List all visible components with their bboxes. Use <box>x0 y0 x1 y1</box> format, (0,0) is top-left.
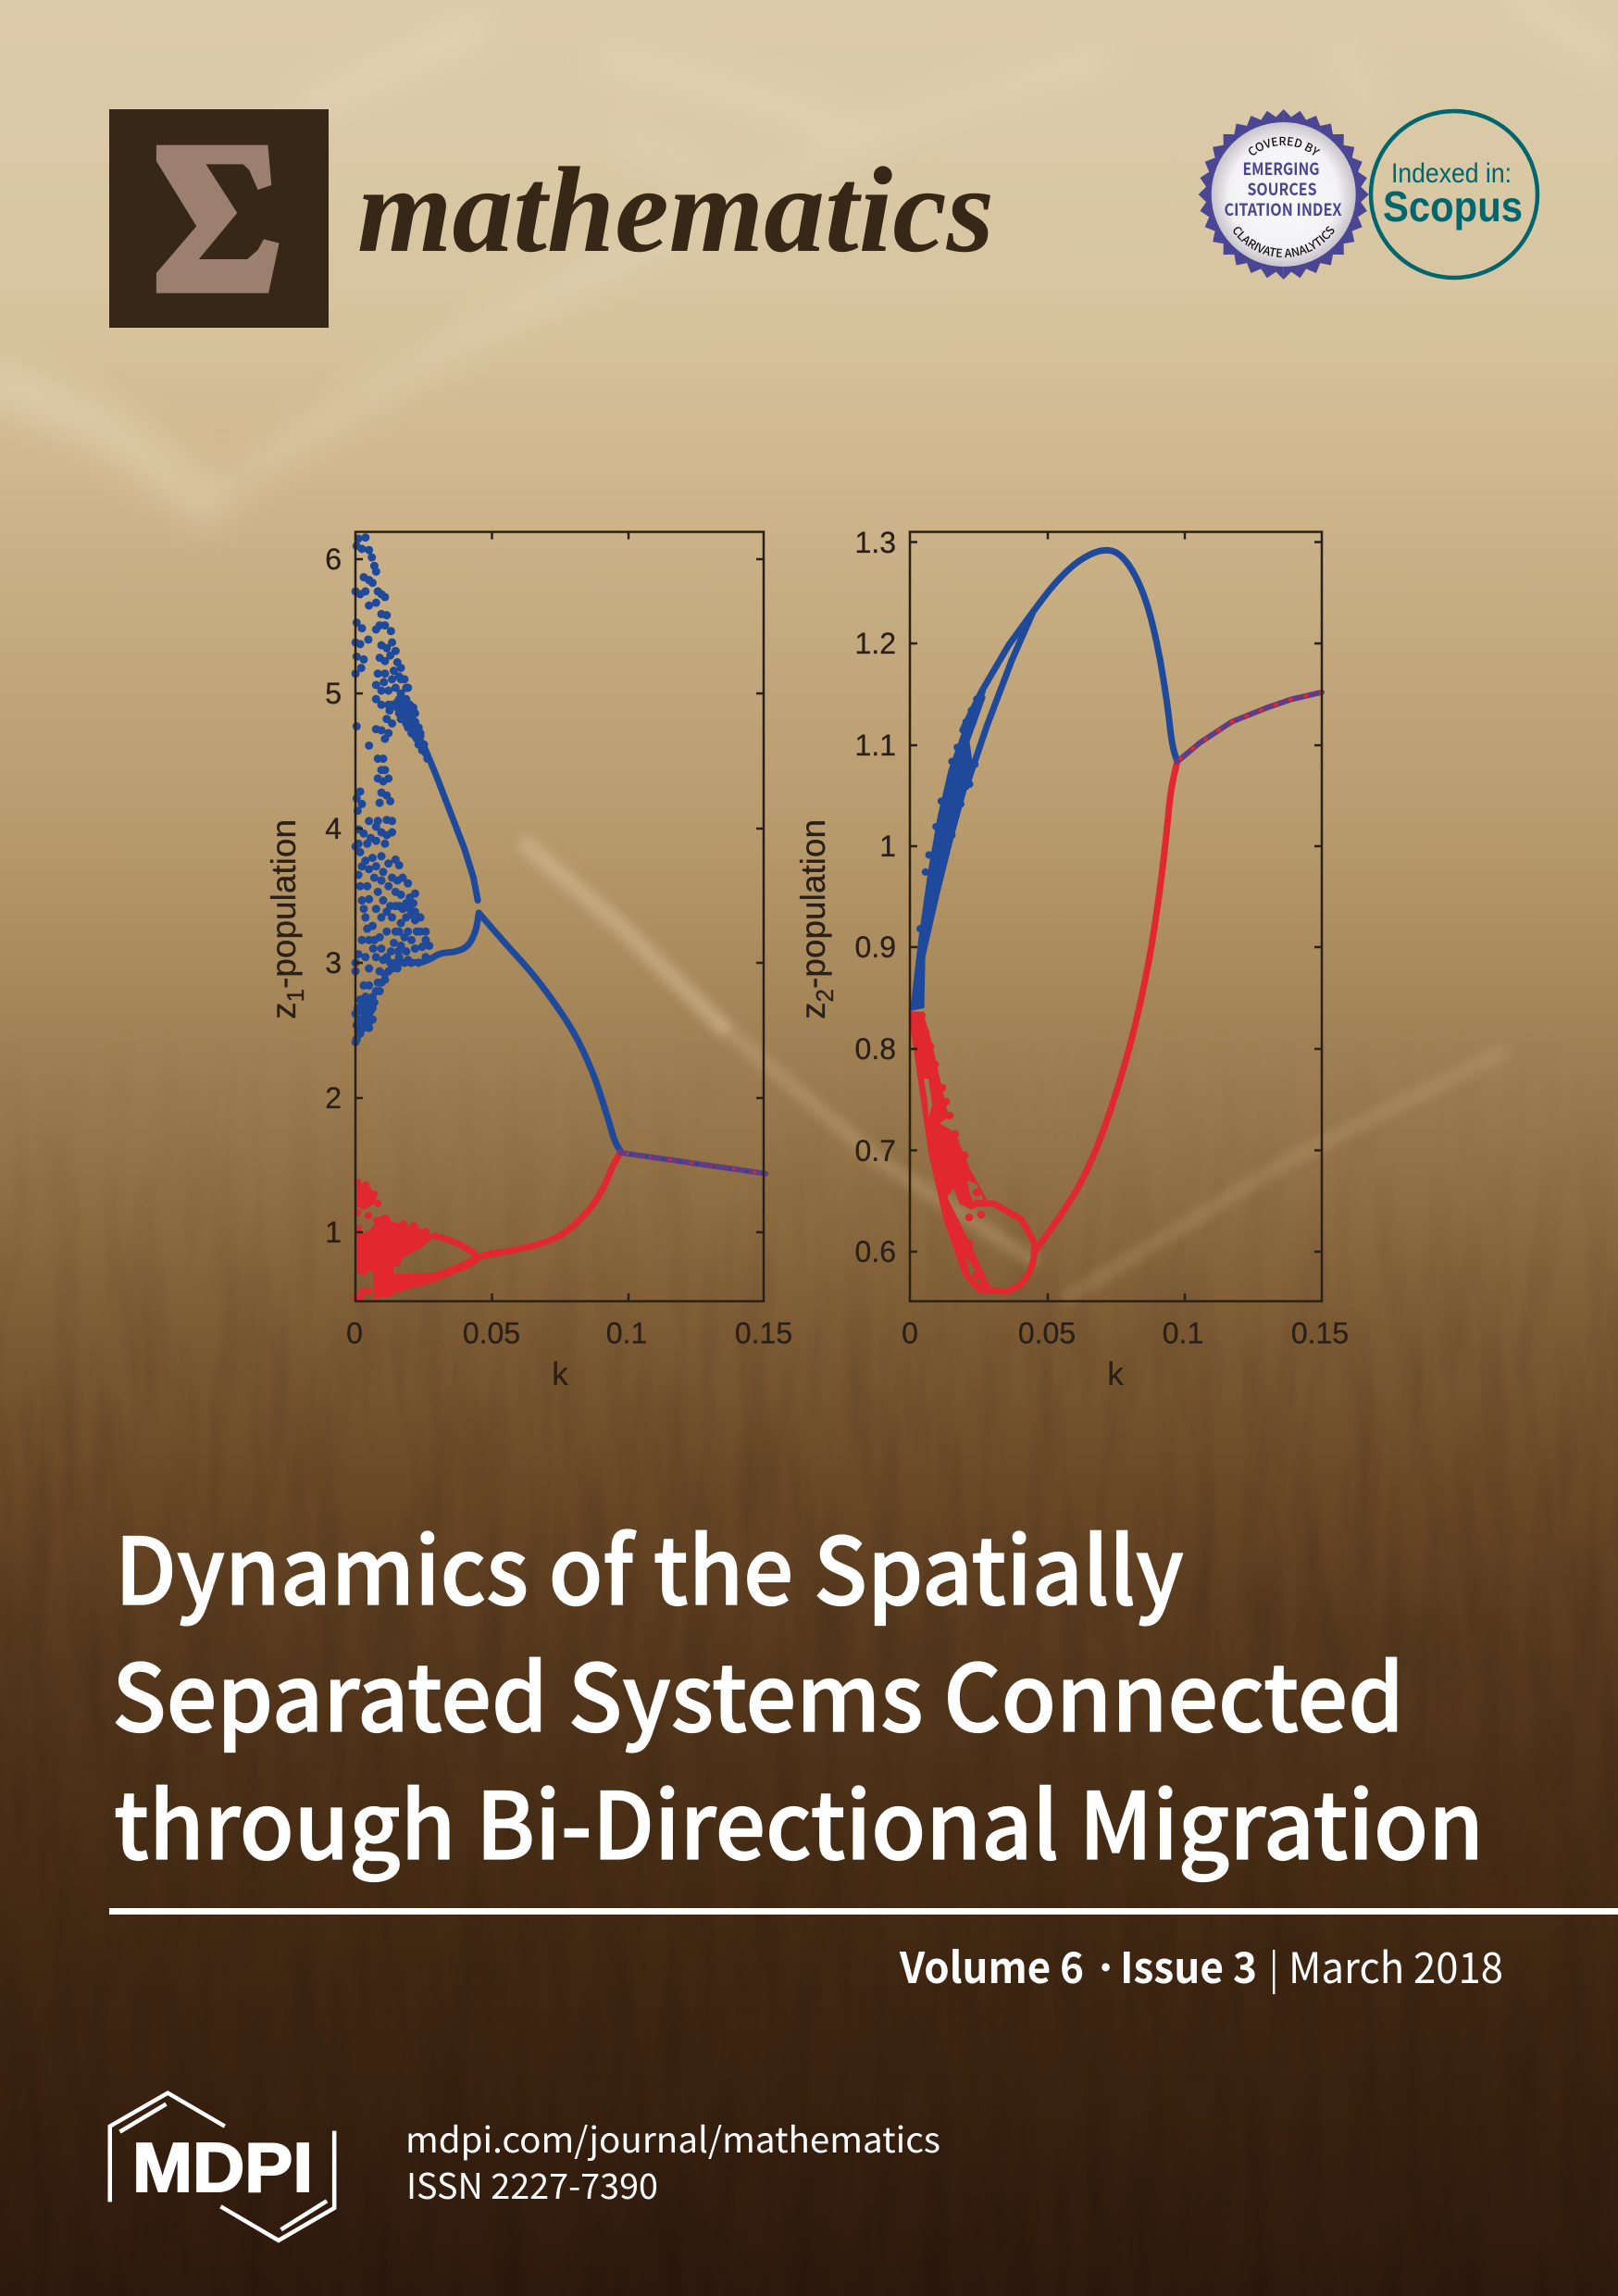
z2 tick labels: 1 <box>879 830 896 863</box>
badge: Emerging Sources Citation Index: COVERED BY <box>1249 137 1320 156</box>
issue line: · <box>1093 1935 1118 1996</box>
z1 tick labels: 0.05 <box>463 1316 520 1350</box>
z2 tick labels: 1.2 <box>855 627 896 660</box>
badge: Emerging Sources Citation Index: CITATION INDEX <box>1224 197 1342 221</box>
journal URL and ISSN: ISSN 2227-7390 <box>406 2158 658 2209</box>
z1 tick labels: 3 <box>325 946 342 980</box>
article title <box>112 1497 1484 1886</box>
z1 axes frame and ticks <box>355 531 764 1302</box>
z1 tick labels: k <box>552 1356 568 1392</box>
article title: through Bi-Directional Migration <box>114 1752 1484 1886</box>
z1 axis title: -population <box>265 819 303 989</box>
z1 tick labels: 4 <box>325 812 342 845</box>
z1 tick labels: 6 <box>325 543 342 576</box>
white rule <box>109 1908 1618 1915</box>
badge: Emerging Sources Citation Index: EMERGING <box>1242 156 1320 181</box>
issue line <box>899 1935 1503 1996</box>
z2 axis title: 2 <box>811 989 839 1002</box>
chart: z2-population bifurcation diagram <box>794 526 1349 1392</box>
z2 tick labels: 0.6 <box>855 1235 896 1268</box>
z2 tick labels: 1.1 <box>855 729 896 762</box>
issue line: March 2018 <box>1288 1935 1503 1996</box>
badge: Indexed in Scopus: Indexed in: <box>1391 158 1512 189</box>
z1 data <box>355 538 765 1300</box>
z2 tick labels: 0.9 <box>855 930 896 964</box>
z2 tick labels: 1.3 <box>855 526 896 559</box>
z1 tick labels: 2 <box>325 1081 342 1115</box>
z1 tick labels: 0 <box>346 1316 363 1350</box>
logo: MDPI hexagon: MDPI <box>132 2128 313 2206</box>
badge: Indexed in Scopus <box>1371 111 1537 278</box>
z1 tick labels: 0.1 <box>606 1316 647 1350</box>
logo: sigma square <box>109 109 329 328</box>
z2 tick labels: 0.7 <box>855 1134 896 1167</box>
z2 tick labels: 0.05 <box>1018 1316 1076 1350</box>
badge: Emerging Sources Citation Index <box>1198 109 1368 280</box>
z1 tick labels <box>325 543 792 1392</box>
z1 axis title: z <box>265 1002 303 1019</box>
article title: Separated Systems Connected <box>112 1624 1404 1758</box>
article title: Dynamics of the Spatially <box>115 1497 1184 1631</box>
journal name: mathematics <box>357 142 994 278</box>
issue line: Volume 6 <box>899 1935 1084 1996</box>
z2 tick labels: 0 <box>902 1316 918 1350</box>
journal URL and ISSN <box>405 2112 940 2209</box>
z1 axis title: 1 <box>281 989 309 1002</box>
badge: Emerging Sources Citation Index: CLARIVATE ANALYTICS <box>1233 226 1335 257</box>
z2 tick labels: 0.8 <box>855 1032 896 1066</box>
z2 axis title: z <box>794 1002 832 1019</box>
z2 tick labels: k <box>1107 1356 1124 1392</box>
badge: Indexed in Scopus: Scopus <box>1383 182 1523 231</box>
issue line: Issue 3 <box>1120 1935 1257 1996</box>
badge: Emerging Sources Citation Index: SOURCES <box>1248 177 1316 201</box>
z2 axes frame and ticks <box>910 531 1322 1302</box>
z2 axis title: -population <box>794 819 832 989</box>
z2 tick labels: 0.15 <box>1291 1316 1349 1350</box>
chart: z1-population bifurcation diagram <box>265 531 792 1392</box>
z2 tick labels: 0.1 <box>1163 1316 1203 1350</box>
logo: MDPI hexagon <box>110 2093 334 2240</box>
z2 data <box>909 550 1322 1293</box>
z2 tick labels <box>855 526 1349 1392</box>
journal URL and ISSN: mdpi.com/journal/mathematics <box>405 2112 940 2163</box>
z1 tick labels: 0.15 <box>735 1316 792 1350</box>
z1 tick labels: 5 <box>325 677 342 710</box>
z1 tick labels: 1 <box>325 1216 342 1249</box>
